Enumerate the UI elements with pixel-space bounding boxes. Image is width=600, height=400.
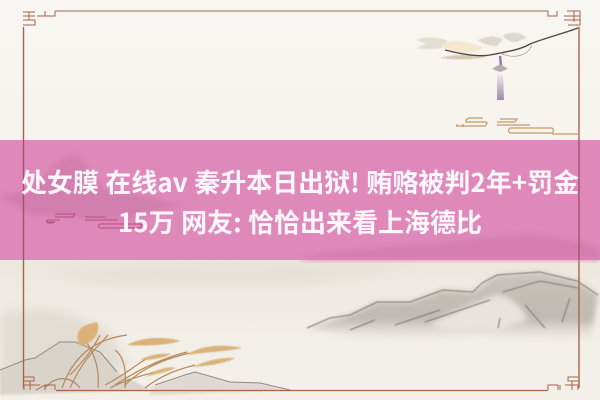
- title: [21, 163, 579, 240]
- ink mountain right: [307, 272, 598, 345]
- tassel: [500, 56, 501, 66]
- pink banner: [0, 140, 600, 260]
- title: 15万 网友: 恰恰出来看上海德比: [118, 203, 482, 240]
- distant hills: [0, 262, 420, 380]
- reed plumes: [77, 322, 242, 377]
- magnolia branch: [417, 28, 578, 100]
- title: 处女膜 在线av 秦升本日出狱! 贿赂被判2年+罚金: [21, 163, 579, 200]
- cloud motif top: [457, 118, 578, 134]
- banner mountains: [0, 140, 600, 260]
- reeds: [45, 322, 242, 388]
- ink mountain left: [0, 342, 290, 395]
